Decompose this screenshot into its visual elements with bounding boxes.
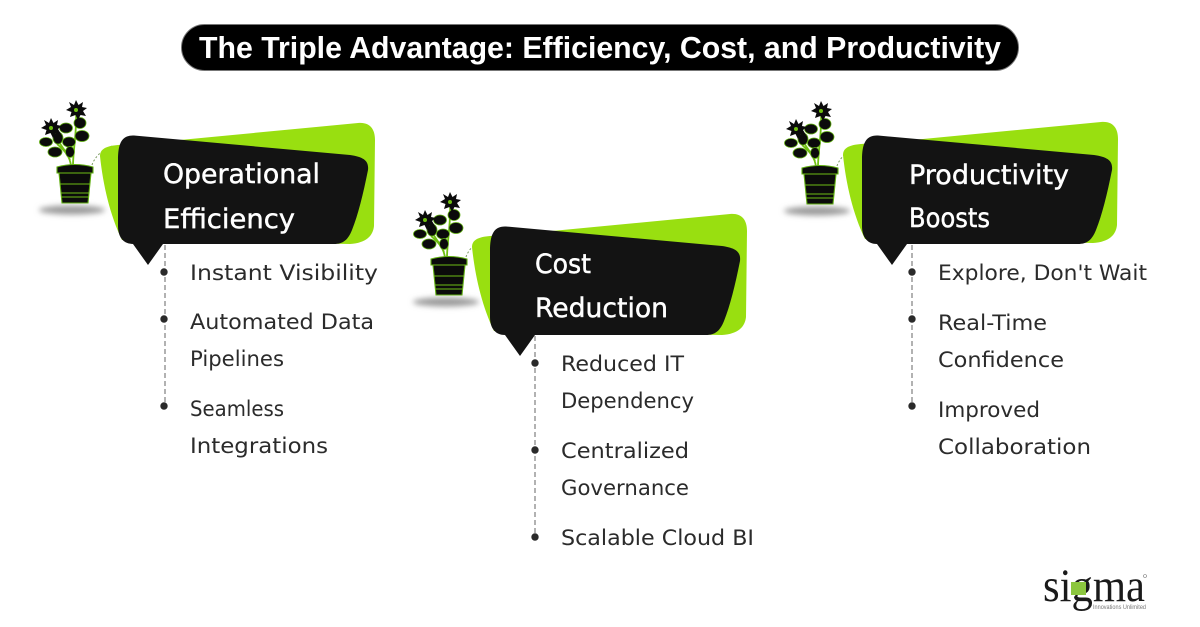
- black speech bubble: [862, 135, 1112, 265]
- heading: cost reduction: Cost: [535, 249, 591, 280]
- green backing shape: [843, 122, 1118, 243]
- bullet list: Collaboration: [938, 435, 1091, 460]
- heading: productivity boosts: [909, 160, 1069, 234]
- black speech bubble: [118, 135, 368, 265]
- bullet list: Pipelines: [190, 347, 284, 372]
- bullet list: [938, 261, 1147, 460]
- bullet list: Improved: [938, 398, 1040, 423]
- bullet list: Confidence: [938, 348, 1064, 373]
- bullet list: Explore, Don't Wait: [938, 261, 1147, 286]
- panel: operational efficiency: [39, 100, 378, 459]
- bullet timeline: [908, 245, 916, 410]
- panel: productivity boosts: [784, 101, 1147, 460]
- title banner: [182, 24, 1018, 70]
- bullet timeline: [531, 336, 539, 541]
- heading: cost reduction: Reduction: [535, 293, 668, 324]
- bullet list: Centralized: [561, 439, 689, 464]
- bullet list: [561, 352, 754, 551]
- bullet list: Real-Time: [938, 311, 1047, 336]
- bullet list: Governance: [561, 476, 689, 501]
- icon: potted plant: [784, 101, 857, 216]
- heading: cost reduction: [535, 249, 668, 324]
- green backing shape: [100, 123, 375, 244]
- bullet list: Dependency: [561, 389, 694, 414]
- bullet list: Automated Data: [190, 310, 374, 335]
- bullet list: Integrations: [190, 434, 328, 459]
- bullet list: Instant Visibility: [190, 261, 378, 286]
- heading: operational efficiency: [163, 159, 320, 235]
- logo: sigma: Innovations Unlimited: [1093, 605, 1146, 611]
- bullet list: Reduced IT: [561, 352, 685, 377]
- bullet list: Scalable Cloud BI: [561, 526, 754, 551]
- icon: potted plant: [39, 100, 112, 214]
- logo: sigma: sigma: [1043, 560, 1145, 612]
- bullet list: Seamless: [190, 397, 284, 422]
- icon: potted plant: [413, 192, 486, 306]
- title text: The Triple Advantage: Efficiency, Cost, and Productivity: [199, 31, 1001, 65]
- heading: productivity boosts: Productivity: [909, 160, 1069, 191]
- heading: operational efficiency: Efficiency: [163, 204, 295, 235]
- black speech bubble: [490, 226, 740, 356]
- bullet list: [190, 261, 378, 459]
- heading: operational efficiency: Operational: [163, 159, 320, 190]
- panel: cost reduction: [413, 192, 754, 551]
- bullet timeline: [160, 245, 168, 410]
- green backing shape: [472, 214, 747, 335]
- heading: productivity boosts: Boosts: [909, 203, 990, 234]
